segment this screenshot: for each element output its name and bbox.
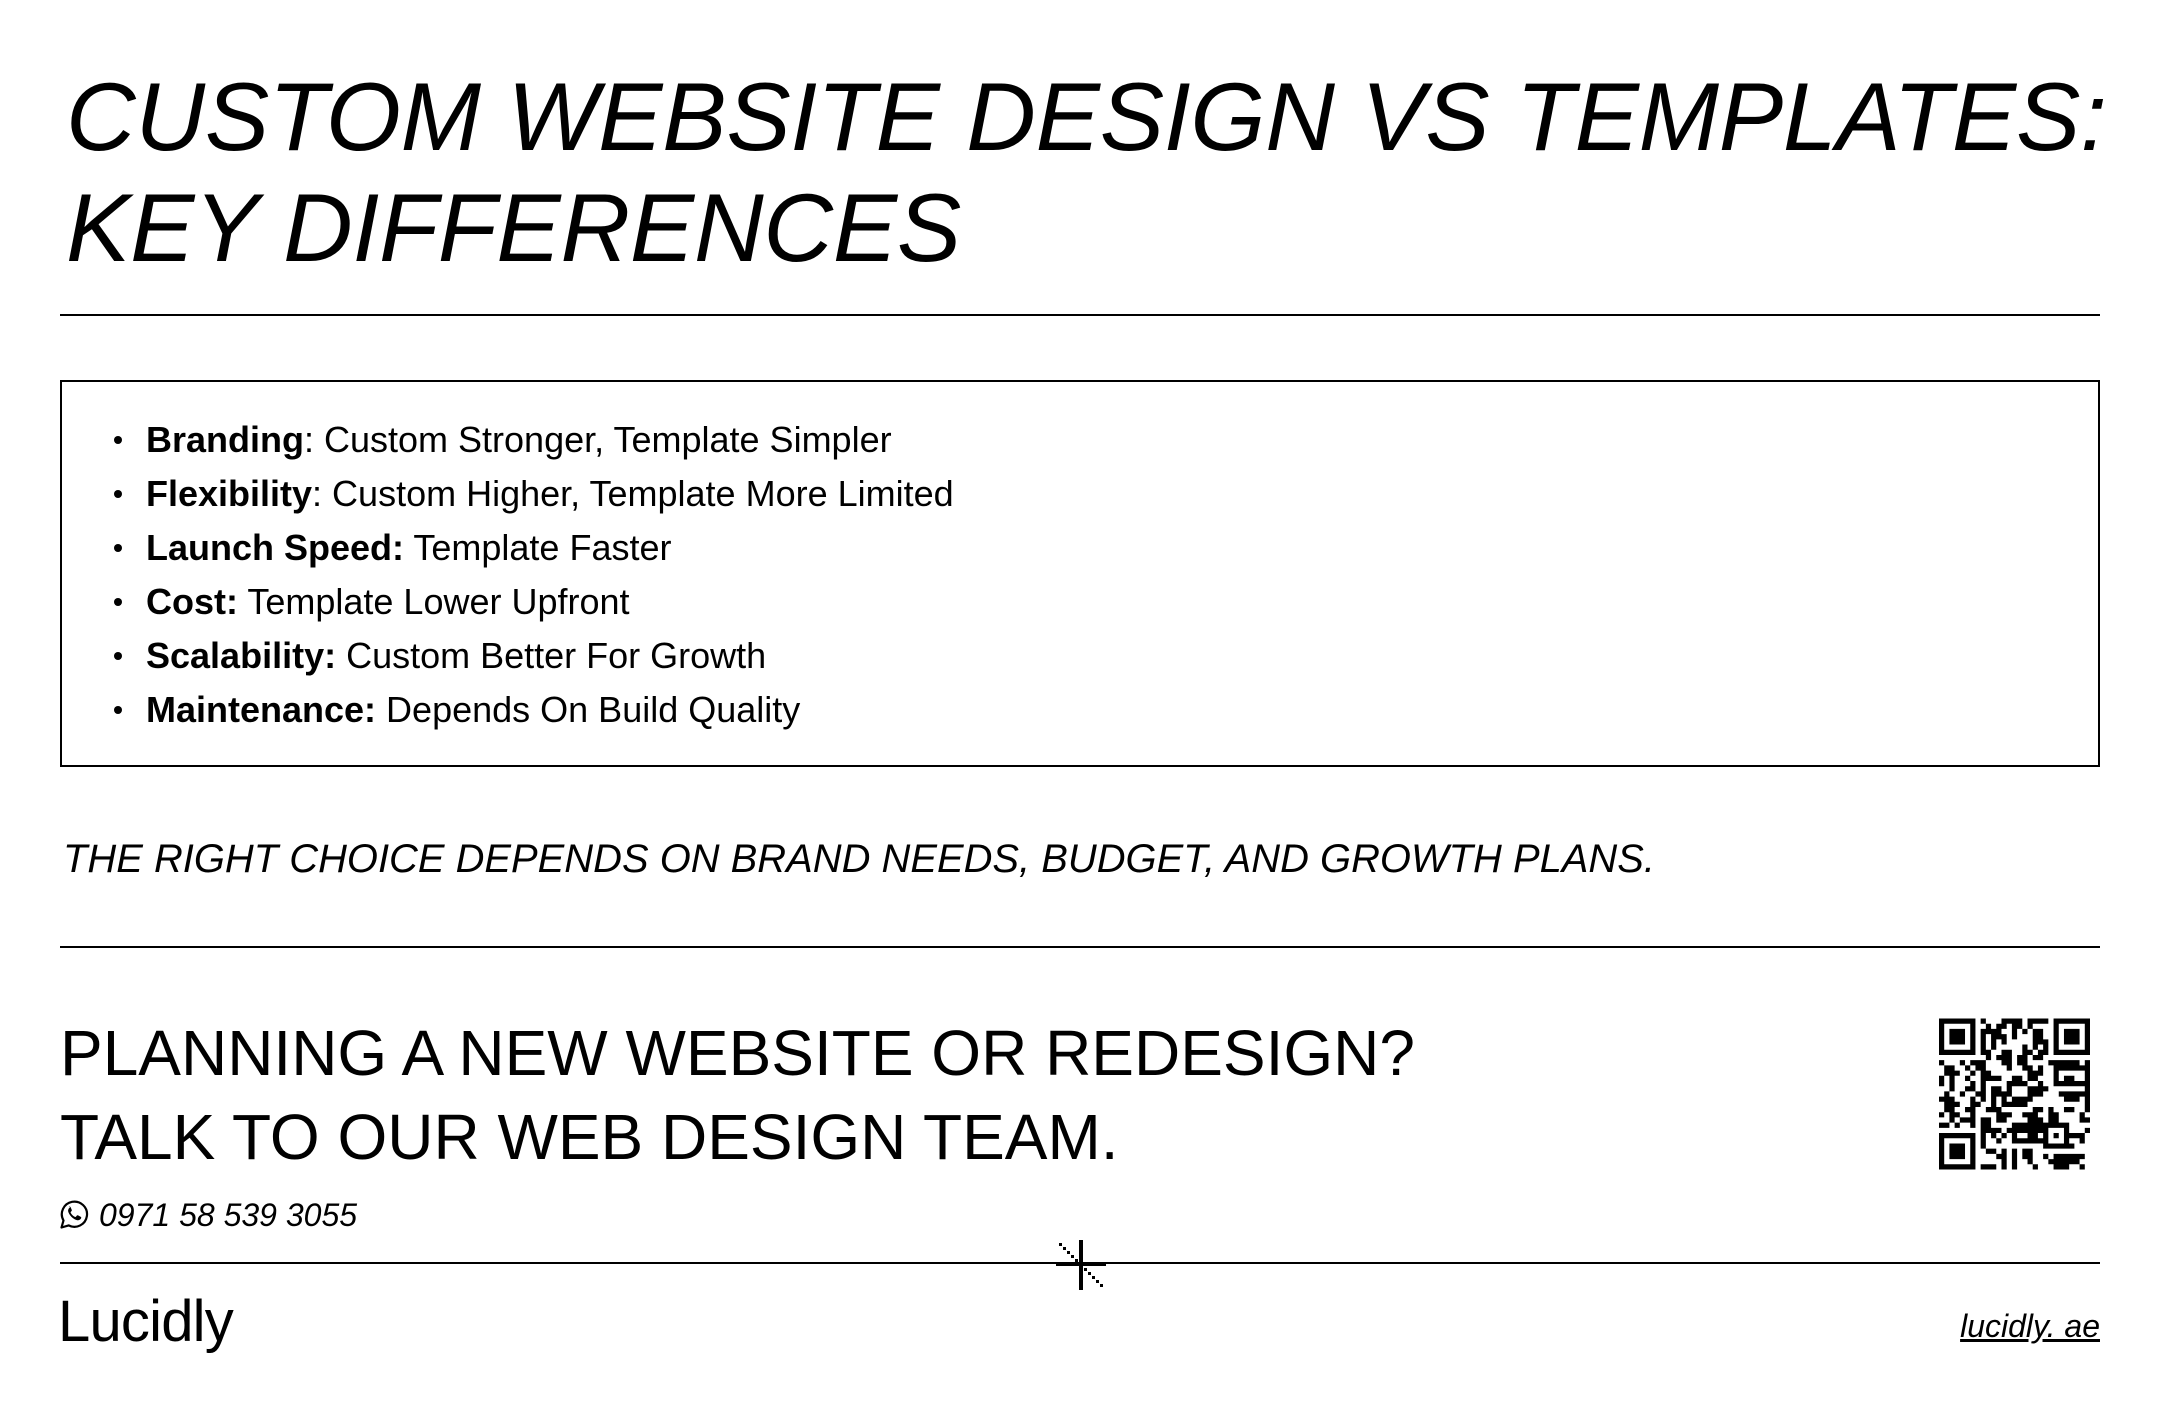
bullet list: Flexibility: Custom Higher, Template More Limited — [146, 473, 954, 514]
statement: THE RIGHT CHOICE DEPENDS ON BRAND NEEDS, BUDGET, AND GROWTH PLANS. — [63, 837, 1655, 881]
bullet list: Launch Speed: Template Faster — [146, 527, 671, 568]
bullet list: Branding: Custom Stronger, Template Simpler — [146, 419, 892, 460]
icon: qr code — [1939, 1018, 2090, 1170]
call to action heading: TALK TO OUR WEB DESIGN TEAM. — [60, 1101, 1119, 1173]
title: KEY DIFFERENCES — [66, 175, 961, 282]
bullet list: Cost: Template Lower Upfront — [146, 581, 630, 622]
title: CUSTOM WEBSITE DESIGN VS TEMPLATES: — [66, 64, 2107, 171]
call to action heading: PLANNING A NEW WEBSITE OR REDESIGN? — [60, 1017, 1415, 1089]
bullet list — [114, 419, 954, 730]
call to action heading — [60, 1017, 1415, 1173]
bullet list: Maintenance: Depends On Build Quality — [146, 689, 800, 730]
icon: spark — [1056, 1240, 1106, 1290]
phone number: 0971 58 539 3055 — [99, 1197, 357, 1233]
title — [66, 64, 2107, 282]
logo: Lucidly — [58, 1289, 233, 1354]
bullet list: Scalability: Custom Better For Growth — [146, 635, 766, 676]
panel: key differences list — [60, 380, 2100, 767]
website link: lucidly. ae — [1960, 1308, 2100, 1344]
icon: whatsapp — [60, 1200, 88, 1229]
